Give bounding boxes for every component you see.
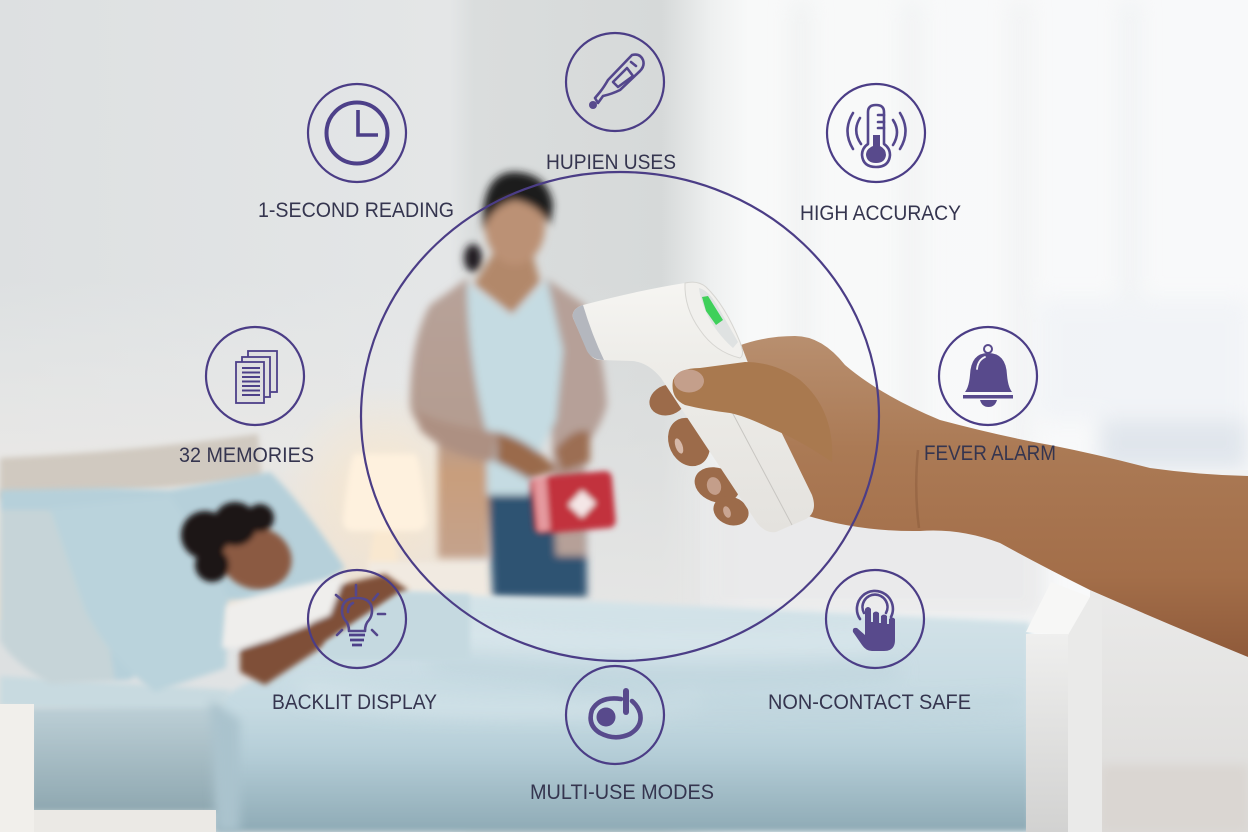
icon: digital thermometer (589, 55, 644, 109)
face (213, 519, 299, 597)
shirt (222, 575, 345, 648)
feature: MULTI-USE MODES (530, 666, 714, 804)
hair (483, 172, 553, 232)
standing woman (410, 172, 607, 597)
neck and chest (474, 252, 540, 314)
feature: 32 MEMORIES (179, 327, 314, 467)
blanket over child (320, 592, 470, 660)
nightstand (368, 562, 492, 610)
face (485, 187, 545, 265)
feature: MULTI-USE MODES: MULTI-USE MODES (530, 781, 714, 804)
feature: FEVER ALARM (924, 327, 1056, 465)
feature: BACKLIT DISPLAY: BACKLIT DISPLAY (272, 691, 437, 714)
jeans (488, 490, 587, 597)
feature: 32 MEMORIES: 32 MEMORIES (179, 444, 314, 467)
icon: touch hand (853, 591, 895, 651)
icon: thermometer with waves (848, 105, 906, 167)
first aid kit (530, 471, 616, 534)
feature: 1-SECOND READING: 1-SECOND READING (258, 199, 454, 222)
icon: light bulb (336, 585, 385, 645)
fingers (645, 379, 753, 530)
blue top (467, 280, 563, 495)
hands (496, 432, 558, 480)
grip seam (732, 412, 792, 525)
feature: NON-CONTACT SAFE: NON-CONTACT SAFE (768, 691, 971, 714)
feature: BACKLIT DISPLAY (272, 570, 437, 714)
pillows (0, 472, 345, 692)
sleeping child (181, 502, 408, 685)
feature: HIGH ACCURACY (800, 84, 961, 225)
feature: FEVER ALARM: FEVER ALARM (924, 442, 1056, 465)
icon: clock (326, 102, 388, 164)
icon: power mode dial (591, 688, 641, 737)
arm (240, 574, 408, 685)
arm and hand holding thermometer (573, 282, 1248, 657)
thumb (672, 362, 832, 462)
large ring (361, 172, 879, 661)
wrist crease (916, 450, 919, 528)
display (699, 288, 738, 348)
white bed frame (0, 582, 1102, 832)
icon: stacked documents (236, 351, 277, 403)
curly hair (181, 502, 274, 582)
feature: NON-CONTACT SAFE (768, 570, 971, 714)
head ring (685, 282, 742, 358)
forearm and palm (738, 336, 1248, 657)
icon: bell (963, 345, 1013, 407)
feature: 1-SECOND READING (258, 84, 454, 222)
forearm sleeve (415, 410, 498, 462)
lamp (280, 385, 490, 595)
bed sheet and mattress (0, 592, 1030, 832)
thumbnail (674, 370, 704, 392)
headboard (0, 434, 262, 500)
thermometer device (573, 282, 814, 532)
feature: HUPIEN USES: HUPIEN USES (546, 151, 676, 174)
gray nozzle ring (573, 305, 604, 360)
feature: HUPIEN USES (546, 33, 676, 174)
feature: HIGH ACCURACY: HIGH ACCURACY (800, 202, 961, 225)
cardigan (410, 278, 490, 558)
